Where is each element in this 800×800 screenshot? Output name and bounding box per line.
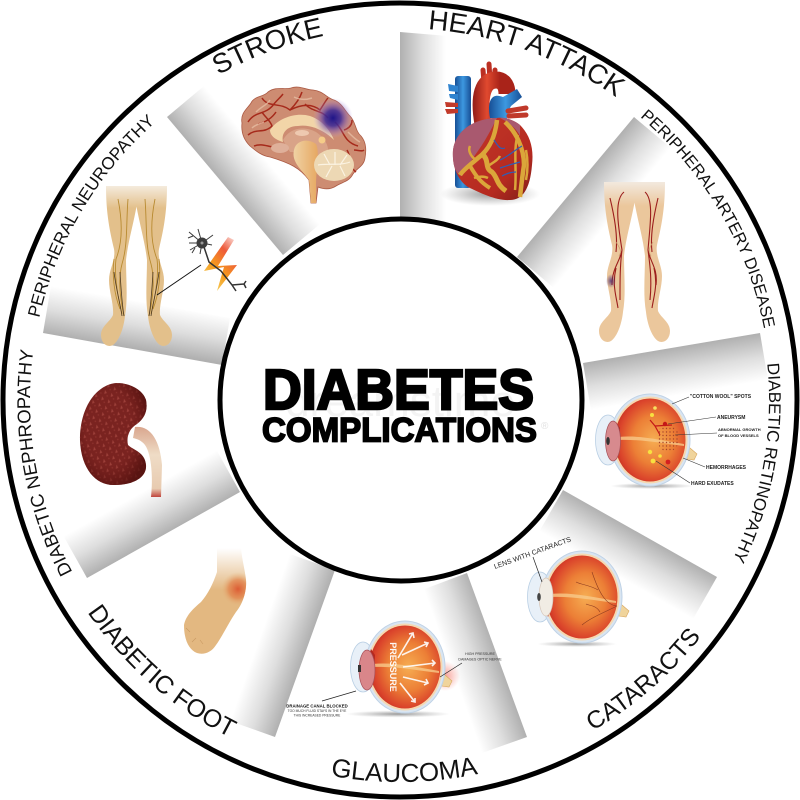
center circle: [220, 219, 582, 581]
label: stroke: STROKE: [213, 18, 323, 72]
label: glaucoma: GLAUCOMA: [332, 758, 478, 782]
callouts: retinopathy labels: ANEURYSM: [717, 415, 745, 421]
icon: heart: [440, 64, 540, 206]
callouts: retinopathy labels: ABNORMAL GROWTH: [718, 427, 761, 432]
icon: diabetic foot: [184, 551, 246, 654]
label: peripheral neuropathy: PERIPHERAL NEUROPATHY: [28, 114, 152, 317]
callouts: glaucoma labels: THIS INCREASED PRESSURE: [294, 714, 341, 718]
callout: lens with cataracts: LENS WITH CATARACTS: [493, 536, 572, 571]
icon: brain: [242, 87, 366, 203]
title: [262, 358, 549, 450]
icon: eye with glaucoma: PRESSURE: [388, 642, 398, 692]
callouts: glaucoma labels: DAMAGES OPTIC NERVE: [458, 658, 502, 662]
callouts: retinopathy labels: HARD EXUDATES: [691, 481, 734, 487]
callouts: retinopathy labels: "COTTON WOOL" SPOTS: [690, 394, 752, 400]
label: heart attack: HEART ATTACK: [430, 10, 626, 97]
icon: legs with nerves: [101, 186, 172, 346]
title line 2: COMPLICATIONS: [262, 412, 537, 450]
label: peripheral artery disease: PERIPHERAL ARTERY DISEASE: [641, 109, 775, 328]
callouts: glaucoma labels: TOO MUCH FLUID STAYS IN THE EYE: [288, 709, 347, 713]
icon: nerve cell with lightning bolt: [157, 229, 246, 295]
callouts: glaucoma labels: [286, 652, 502, 718]
callouts: glaucoma labels: DRAINAGE CANAL BLOCKED: [286, 704, 348, 708]
label: diabetic foot: DIABETIC FOOT: [88, 604, 238, 735]
watermark: dreamstime: [285, 377, 515, 426]
icon: eye with retinopathy: [596, 394, 697, 489]
label: diabetic retinopathy: DIABETIC RETINOPATHY: [734, 364, 781, 564]
callouts: retinopathy labels: [656, 394, 761, 487]
title line 1: DIABETES: [263, 358, 534, 422]
label: cataracts: CATARACTS: [588, 628, 699, 728]
callouts: glaucoma labels: HIGH PRESSURE: [465, 652, 495, 656]
label: diabetic nephropathy: DIABETIC NEPHROPATHY: [17, 349, 72, 576]
callouts: retinopathy labels: HEMORRHAGES: [706, 465, 747, 471]
icon: legs with arteries: [599, 182, 670, 342]
registered mark: ®: [541, 421, 549, 432]
callouts: retinopathy labels: OF BLOOD VESSELS: [718, 433, 759, 438]
icon: kidney: [80, 383, 162, 497]
icon: eye with cataracts: [528, 551, 629, 647]
icon: eye with glaucoma: [346, 621, 460, 718]
